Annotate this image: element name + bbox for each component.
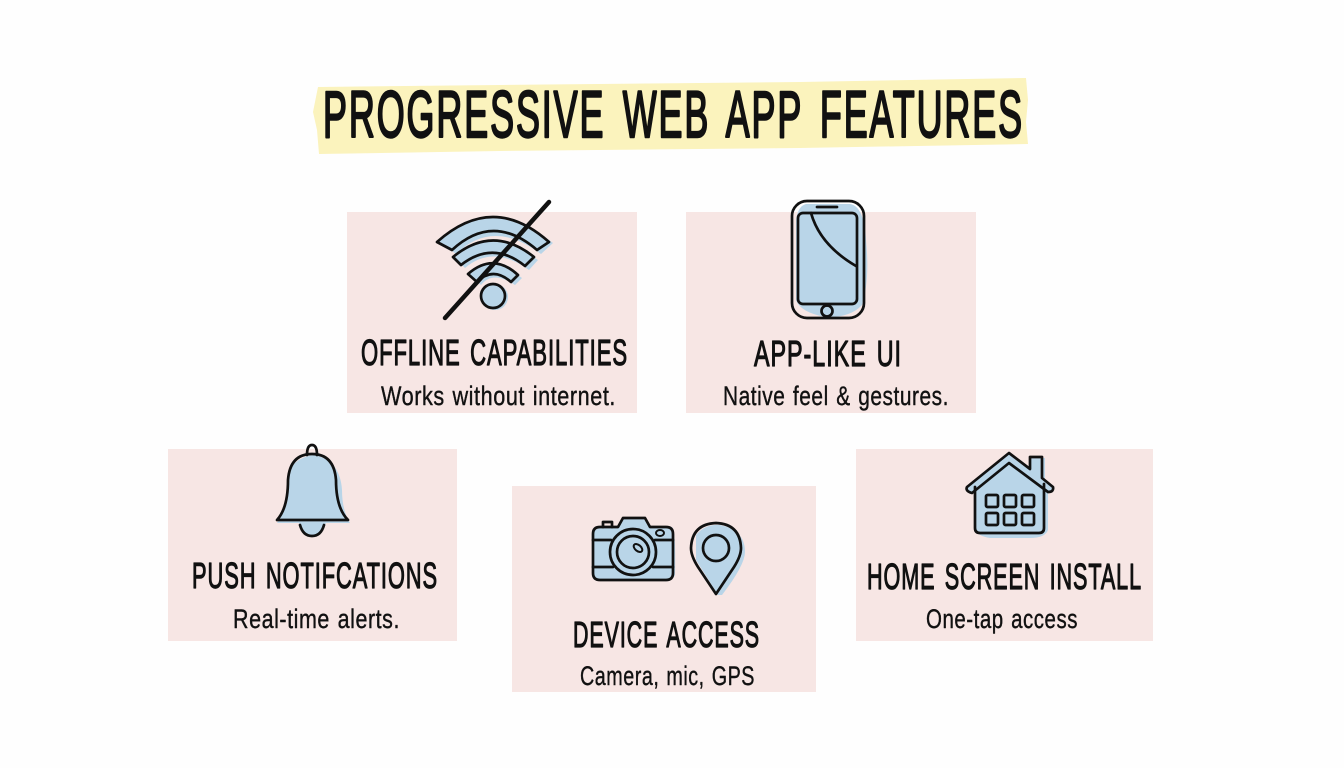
icon: house [967, 453, 1053, 538]
icon: camera [593, 518, 675, 581]
description: offline capabilities: Works without internet. [381, 381, 616, 411]
heading: push notifications: PUSH NOTIFCATIONS [192, 555, 438, 596]
title [313, 77, 1028, 154]
description: app-like ui: Native feel & gestures. [723, 381, 949, 411]
heading: app-like ui: APP-LIKE UI [754, 333, 902, 374]
panel: app-like ui [686, 201, 976, 413]
panel: push notifications [168, 445, 457, 641]
heading: device access: DEVICE ACCESS [573, 614, 760, 655]
icon: bell [277, 445, 350, 536]
panel: home screen install [856, 449, 1153, 641]
icon: smartphone [792, 201, 867, 318]
panel: device access [512, 486, 816, 692]
description: push notifications: Real-time alerts. [233, 604, 400, 634]
icon: wifi crossed out [437, 202, 553, 318]
panel: offline capabilities [347, 202, 637, 413]
description: device access: Camera, mic, GPS [580, 661, 755, 691]
description: home screen install: One-tap access [926, 604, 1078, 634]
heading: home screen install: HOME SCREEN INSTALL [867, 556, 1142, 597]
heading: offline capabilities: OFFLINE CAPABILITIES [361, 332, 628, 373]
icon: location pin [691, 523, 745, 595]
